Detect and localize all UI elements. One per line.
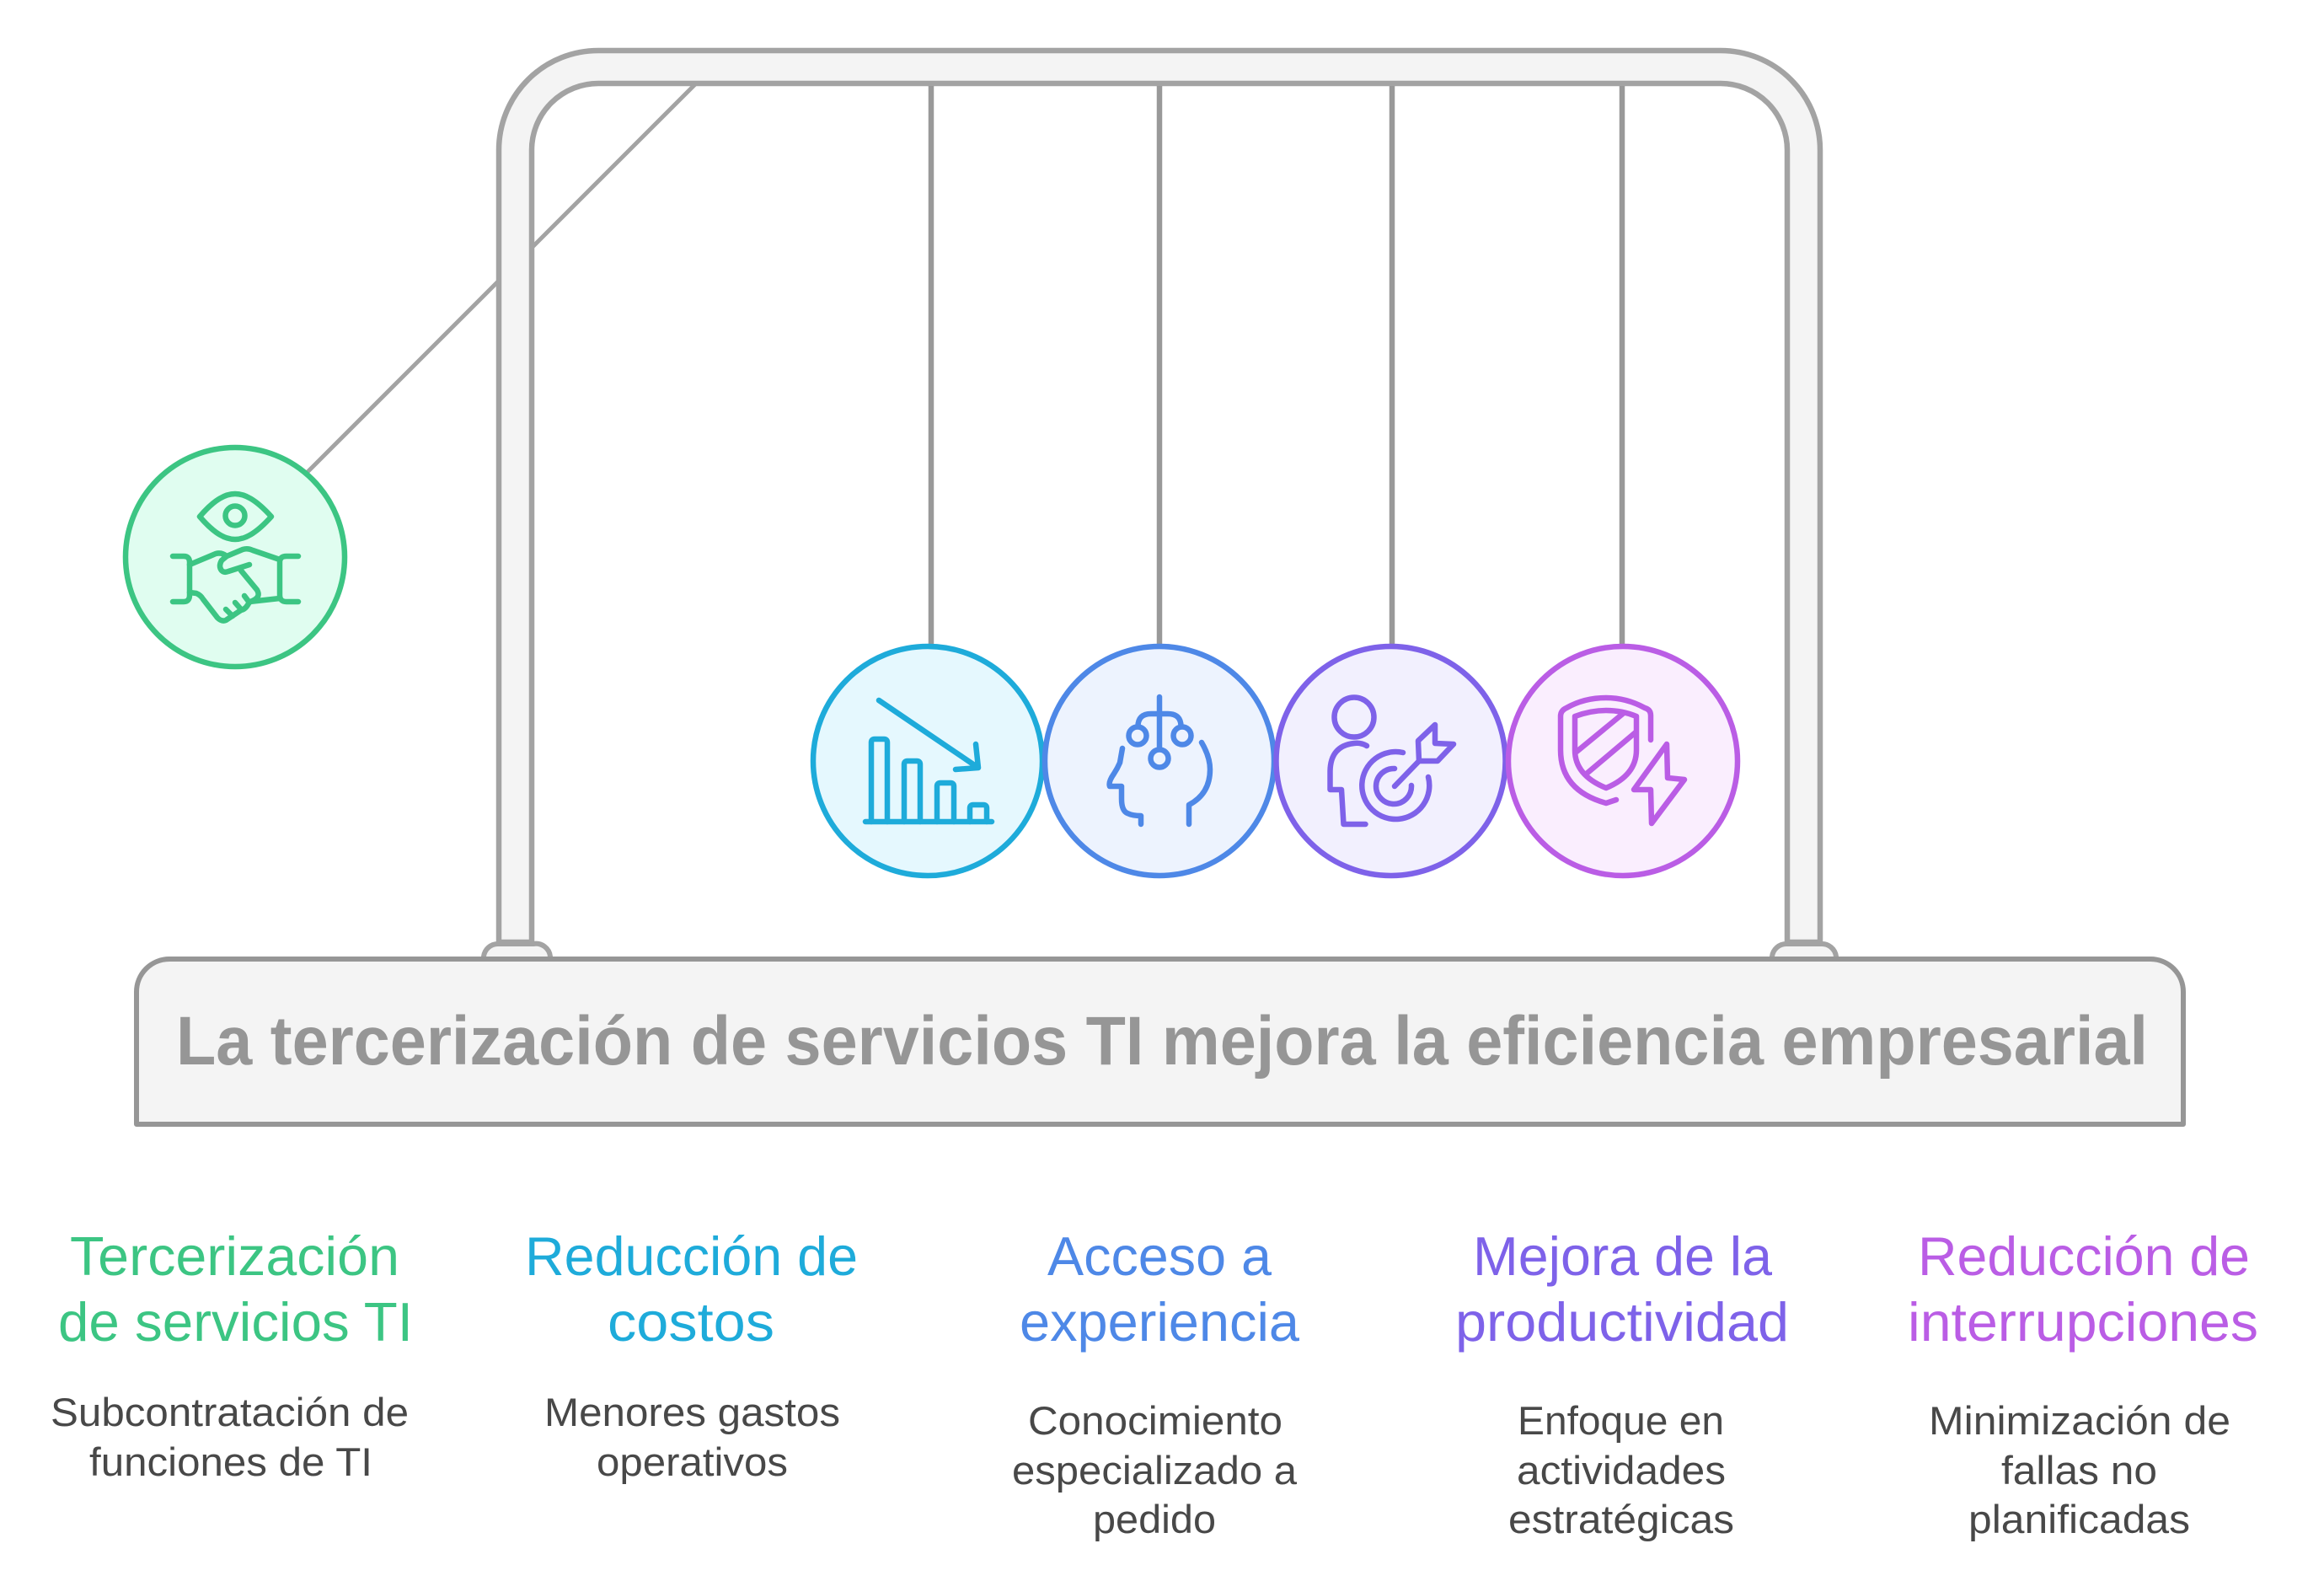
- heading: Tercerización: [70, 1225, 399, 1287]
- description: estratégicas: [1508, 1497, 1734, 1541]
- heading: Mejora de la: [1473, 1225, 1773, 1287]
- heading: [58, 1225, 413, 1353]
- description: pedido: [1093, 1497, 1216, 1541]
- title: La tercerización de servicios TI mejora la eficiencia empresarial: [176, 1003, 2148, 1080]
- ball: acceso a experiencia: [1045, 646, 1274, 876]
- ball: reducción de interrupciones: [1508, 646, 1738, 876]
- description: [1929, 1398, 2230, 1541]
- heading: interrupciones: [1908, 1291, 2258, 1353]
- description: operativos: [597, 1439, 788, 1484]
- description: Menores gastos: [544, 1390, 840, 1434]
- description: [1508, 1398, 1734, 1541]
- description: funciones de TI: [89, 1439, 372, 1484]
- description: Minimización de: [1929, 1398, 2230, 1443]
- icon: eye and handshake: [173, 494, 298, 621]
- description: especializado a: [1012, 1448, 1298, 1493]
- ball: reducción de costos: [813, 646, 1042, 876]
- description: actividades: [1517, 1448, 1726, 1493]
- heading: [1020, 1225, 1300, 1353]
- column 2: reducción de costos: [525, 1225, 858, 1484]
- hanging strings: [931, 86, 1622, 646]
- column 1: tercerización de servicios TI: [51, 1225, 413, 1484]
- icon: shield and lightning bolt: [1561, 698, 1684, 823]
- description: planificadas: [1968, 1497, 2190, 1541]
- column 4: mejora de la productividad: [1455, 1225, 1789, 1541]
- heading: [1908, 1225, 2258, 1353]
- column 3: acceso a experiencia: [1012, 1225, 1300, 1541]
- icon: descending bar chart: [865, 700, 992, 822]
- cradle frame: [499, 51, 1820, 942]
- heading: [525, 1225, 858, 1353]
- heading: costos: [608, 1291, 774, 1353]
- column 5: reducción de interrupciones: [1908, 1225, 2258, 1541]
- description: [1012, 1398, 1298, 1541]
- heading: Reducción de: [525, 1225, 858, 1287]
- ball: mejora de la productividad: [1276, 646, 1505, 876]
- heading: Acceso a: [1047, 1225, 1272, 1287]
- heading: de servicios TI: [58, 1291, 413, 1353]
- ball: tercerización: [126, 448, 345, 667]
- description: [544, 1390, 840, 1484]
- heading: productividad: [1455, 1291, 1789, 1353]
- icon: person with target: [1330, 698, 1454, 824]
- description: Subcontratación de: [51, 1390, 409, 1434]
- description: Enfoque en: [1518, 1398, 1724, 1443]
- description: fallas no: [2001, 1448, 2157, 1493]
- description: [51, 1390, 409, 1484]
- base panel with title: [137, 959, 2183, 1124]
- heading: Reducción de: [1918, 1225, 2250, 1287]
- heading: experiencia: [1020, 1291, 1300, 1353]
- description: Conocimiento: [1028, 1398, 1282, 1443]
- heading: [1455, 1225, 1789, 1353]
- right foot of frame: [1772, 944, 1836, 961]
- swinging string of raised ball: [307, 83, 696, 473]
- icon: head with circuit: [1110, 697, 1210, 824]
- left foot of frame: [484, 944, 550, 961]
